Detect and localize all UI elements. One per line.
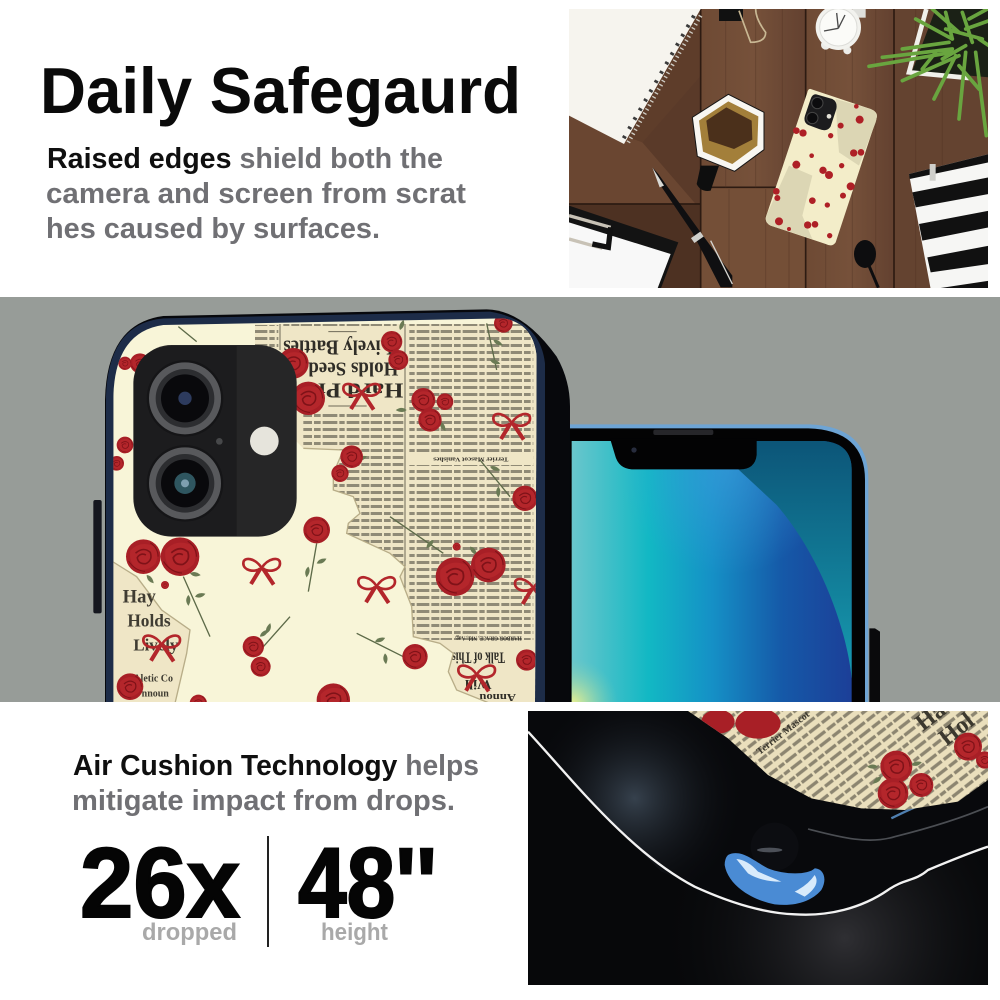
printed case area: Hol bbox=[934, 708, 980, 751]
pen bbox=[652, 167, 732, 287]
stat: 26x dropped: dropped bbox=[142, 919, 237, 946]
newspaper lower left: Holds bbox=[127, 611, 171, 631]
newspaper headlines upside down: Terrier Mascot Vanishes bbox=[433, 456, 508, 463]
text block: air cushion description: Air Cushion Technology helps bbox=[73, 750, 479, 782]
newspaper headlines upside down: Annou bbox=[479, 691, 516, 702]
panel: gray band with phone case and phone bbox=[0, 297, 1000, 717]
newspaper lower left: nnoun bbox=[142, 689, 169, 700]
printed case area bbox=[688, 711, 988, 810]
text block: air cushion description: mitigate impact from drops. bbox=[72, 785, 455, 817]
newspaper headlines upside down bbox=[283, 336, 522, 702]
roses bbox=[109, 314, 538, 717]
blue air cushion bbox=[724, 848, 824, 905]
newspaper headlines upside down: Will bbox=[465, 677, 492, 692]
title: Daily Safegaurd bbox=[40, 54, 521, 127]
screen bbox=[572, 441, 852, 708]
text block: raised edges description: Raised edges shield both the bbox=[47, 143, 443, 175]
spoon bbox=[854, 240, 878, 288]
plant in white pot bbox=[869, 9, 989, 136]
photo: desk flat lay with phone case bbox=[569, 5, 989, 289]
case body bbox=[749, 840, 919, 915]
stat: 48 inches height: 48'' bbox=[298, 827, 437, 938]
phone case back bbox=[93, 309, 570, 717]
printed case area: Terrier Mascot bbox=[755, 709, 813, 757]
clipboard bbox=[569, 206, 678, 289]
newspaper headlines upside down: Lively Battles bbox=[283, 336, 393, 358]
text block: raised edges description: camera and screen from scrat bbox=[46, 178, 466, 210]
phone front: iPhone with screen bbox=[560, 424, 880, 708]
newspaper lower left: Hay bbox=[123, 587, 157, 608]
newspaper upper right bbox=[250, 317, 543, 707]
newspaper lower left bbox=[110, 560, 190, 703]
text block: raised edges description bbox=[46, 143, 466, 245]
text block: raised edges description: hes caused by surfaces. bbox=[46, 213, 380, 245]
newspaper headlines upside down: Hard Pr bbox=[315, 378, 403, 400]
white edge highlight bbox=[528, 732, 988, 915]
newspaper lower left: Aletic Co bbox=[133, 673, 173, 684]
binder clip and string bbox=[719, 9, 766, 42]
wallpaper dark corner bbox=[738, 441, 852, 678]
newspaper headlines upside down: Talk of This bbox=[452, 649, 505, 666]
newspaper headlines upside down: Holds Seed bbox=[308, 358, 398, 380]
text block: air cushion description bbox=[72, 750, 479, 817]
camera module bbox=[133, 345, 297, 537]
coffee mug bbox=[692, 94, 764, 191]
newspaper headlines upside down: HARBOR GRACE, Nfd., Aug. bbox=[455, 635, 522, 642]
stat: 48 inches height: height bbox=[321, 919, 388, 946]
torn edge shadow bbox=[303, 448, 490, 703]
photo: case corner closeup with air cushion bbox=[528, 697, 995, 992]
notch bbox=[610, 438, 757, 469]
phone case on desk bbox=[766, 89, 877, 245]
notebook bbox=[569, 9, 701, 144]
printed case area: Ha bbox=[911, 697, 951, 736]
striped notebook bbox=[909, 154, 989, 289]
newspaper lower left: Lively bbox=[133, 636, 179, 655]
bows bbox=[143, 384, 552, 691]
stat: 26x dropped: 26x bbox=[80, 827, 240, 938]
clock bbox=[816, 5, 866, 54]
stems and leaves bbox=[146, 319, 510, 664]
